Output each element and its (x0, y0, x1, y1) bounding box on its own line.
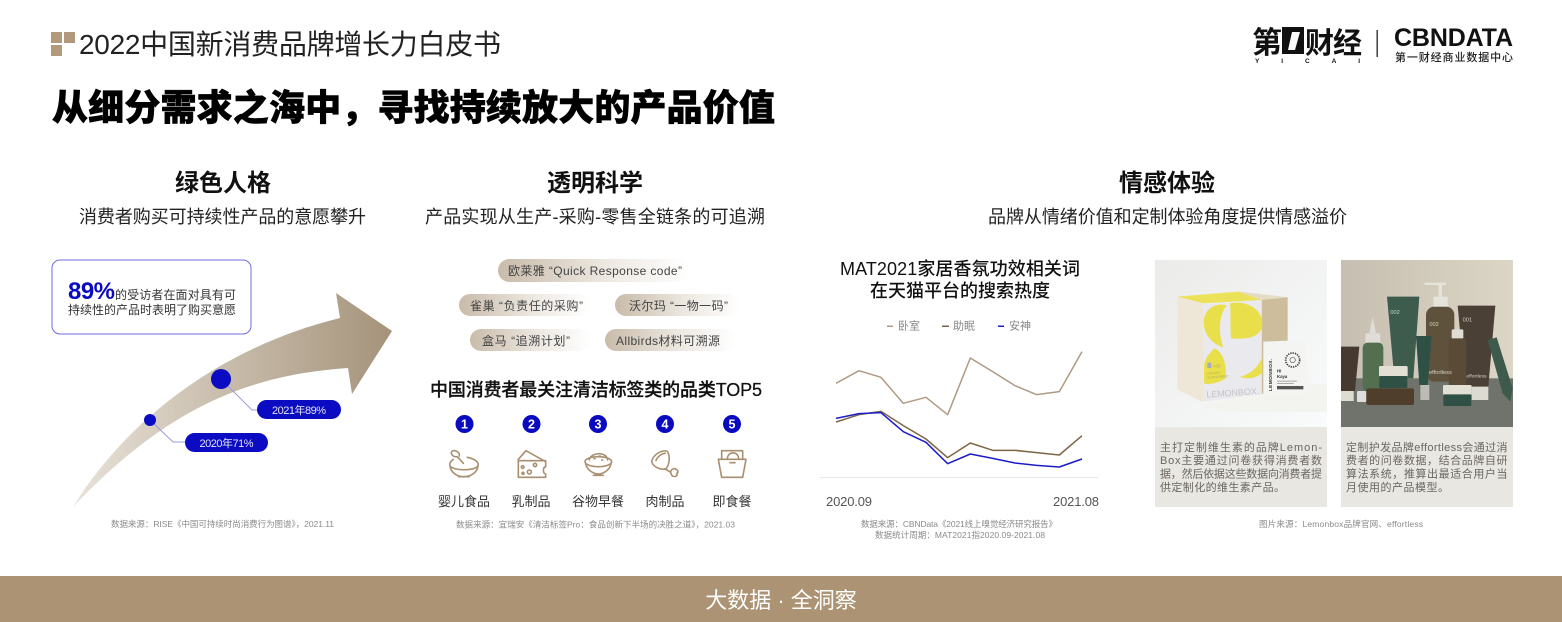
tag: Walmart (615, 294, 740, 316)
logo: CBNData: CBNDATA (1394, 24, 1513, 52)
rank badges: 3 (595, 418, 602, 432)
icon: ready meal box (718, 451, 746, 477)
caption: effortless: 算法系统，推算出最适合用户当 (1346, 466, 1508, 480)
category labels: 谷物早餐 (572, 494, 624, 509)
tag: Allbirds (605, 329, 735, 351)
growth arrow (73, 293, 392, 507)
category labels: 即食餐 (712, 494, 752, 509)
chart title: MAT2021家居香氛功效相关词 (840, 259, 1080, 279)
tag: Nestle (459, 294, 590, 316)
product image: effortless: 001 (1463, 318, 1472, 324)
rank badges: 5 (729, 418, 736, 432)
icon: baby food bowl (450, 451, 478, 477)
source note: 图片来源：Lemonbox品牌官网、effortless (1259, 519, 1423, 529)
subheading: green personality: 消费者购买可持续性产品的意愿攀升 (79, 207, 366, 227)
chart axis labels: 2021.08 (1053, 494, 1099, 509)
rank badges: 4 (662, 418, 669, 432)
main heading: 从细分需求之海中，寻找持续放大的产品价值 (52, 87, 775, 128)
tag: Walmart: 沃尔玛 “一物一码” (629, 298, 728, 313)
category labels (438, 494, 752, 509)
product image: LemonBox: LEMONBOX. (1268, 358, 1274, 391)
marker: 2021: 2021年89% (272, 403, 326, 417)
product image: LemonBox: ×30 (1213, 363, 1221, 368)
logo: CBNData: 第一财经商业数据中心 (1395, 50, 1513, 64)
tag: Hema: 盒马 “追溯计划” (482, 333, 570, 348)
product image: effortless: effortless (1466, 374, 1487, 380)
source note: 数据统计周期：MAT2021指2020.09-2021.08 (875, 530, 1045, 540)
caption: effortless: 定制护发品牌effortless会通过消 (1346, 440, 1508, 454)
tag: L'Oreal (498, 259, 690, 282)
icon: ham leg (652, 451, 678, 477)
chart legend: 安神 (1009, 318, 1031, 332)
category labels: 婴儿食品 (438, 494, 490, 509)
caption: LemonBox (1155, 427, 1327, 507)
product image: effortless (1341, 260, 1513, 427)
tag: Hema (470, 329, 590, 351)
chart axis labels (826, 494, 1099, 509)
logo: Yicai: YICAI (1255, 58, 1360, 65)
logo: Yicai: 第 (1252, 27, 1282, 60)
rank badges: 1 (461, 418, 468, 432)
product image: effortless: 002 (1429, 322, 1439, 328)
subheading: emotional experience: 品牌从情绪价值和定制体验角度提供情感溢价 (988, 207, 1347, 227)
rank badges: 2 (528, 418, 535, 432)
source note: 数据来源：宜瑞安《清洁标签Pro：食品创新下半场的决胜之道》，2021.03 (456, 520, 735, 530)
line chart (820, 352, 1098, 477)
marker: 2021 (211, 369, 341, 419)
heading: emotional experience: 情感体验 (1119, 169, 1215, 197)
caption: LemonBox: 主打定制维生素的品牌Lemon- (1160, 440, 1322, 454)
callout: 89 percent: 89% (68, 278, 115, 305)
caption: effortless: 月使用的产品模型。 (1346, 480, 1449, 494)
chart title: 在天猫平台的搜索热度 (870, 281, 1050, 301)
product image: LemonBox: DIETARY (1207, 371, 1222, 376)
marker: 2020: 2020年71% (200, 436, 254, 450)
category labels: 肉制品 (645, 494, 685, 509)
source note (861, 519, 1057, 540)
source note: 数据来源：RISE《中国可持续时尚消费行为图谱》，2021.11 (111, 519, 334, 529)
heading: top 5 categories: 中国消费者最关注清洁标签类的品类TOP5 (430, 380, 762, 400)
logo: Yicai: 财经 (1305, 27, 1362, 60)
product image: LemonBox (1155, 260, 1327, 427)
heading: transparent science: 透明科学 (547, 170, 643, 197)
chart axis labels: 2020.09 (826, 494, 872, 509)
tag: Nestle: 雀巢 “负责任的采购” (470, 298, 583, 313)
logo: Yicai (1252, 27, 1362, 65)
subheading: transparent science: 产品实现从生产-采购-零售全链条的可追溯 (425, 207, 765, 227)
caption: effortless: 费者的问卷数据，结合品牌自研 (1346, 453, 1508, 467)
callout: 89 percent (52, 260, 251, 334)
report title: 2022中国新消费品牌增长力白皮书 (79, 29, 501, 60)
chart title (840, 259, 1080, 301)
icon: cheese (518, 451, 546, 477)
tag: Allbirds: Allbirds材料可溯源 (616, 333, 720, 348)
rank badges (456, 415, 741, 433)
tag: L'Oreal: 欧莱雅 “Quick Response code” (508, 263, 682, 278)
caption: LemonBox: 据，然后依据这些数据向消费者提 (1160, 466, 1322, 480)
caption: effortless (1341, 427, 1513, 507)
panel: emotional experience (820, 169, 1513, 540)
chart legend: 助眠 (953, 318, 975, 332)
caption: LemonBox: Box主要通过问卷获得消费者数 (1160, 453, 1322, 467)
product image: effortless: effortless (1429, 370, 1452, 376)
product image: effortless: 002 (1390, 310, 1400, 316)
header logo mark (51, 32, 75, 56)
callout: 89 percent: 持续性的产品时表明了购买意愿 (68, 302, 236, 317)
callout: 89 percent: 的受访者在面对具有可 (115, 287, 236, 302)
source note: 数据来源：CBNData《2021线上嗅觉经济研究报告》 (861, 519, 1057, 529)
product image: LemonBox: Hi (1277, 368, 1281, 373)
panel: transparent science (425, 170, 765, 530)
product image: LemonBox: LEMONBOX. (1206, 386, 1259, 400)
footer band: 大数据 · 全洞察 (705, 588, 857, 613)
logo divider (1376, 30, 1378, 57)
heading: green personality: 绿色人格 (175, 170, 271, 197)
marker: 2020 (144, 414, 268, 452)
product image: LemonBox: Kaya (1277, 374, 1288, 379)
caption: LemonBox: 供定制化的维生素产品。 (1160, 480, 1285, 494)
chart legend: 卧室 (898, 318, 920, 332)
chart legend (887, 318, 1031, 332)
panel: green personality (52, 170, 392, 529)
footer band (0, 576, 1562, 622)
category labels: 乳制品 (511, 494, 551, 509)
product image: LemonBox: SUPPLEMENT (1207, 374, 1229, 380)
icon: cereal bowl (585, 454, 612, 475)
